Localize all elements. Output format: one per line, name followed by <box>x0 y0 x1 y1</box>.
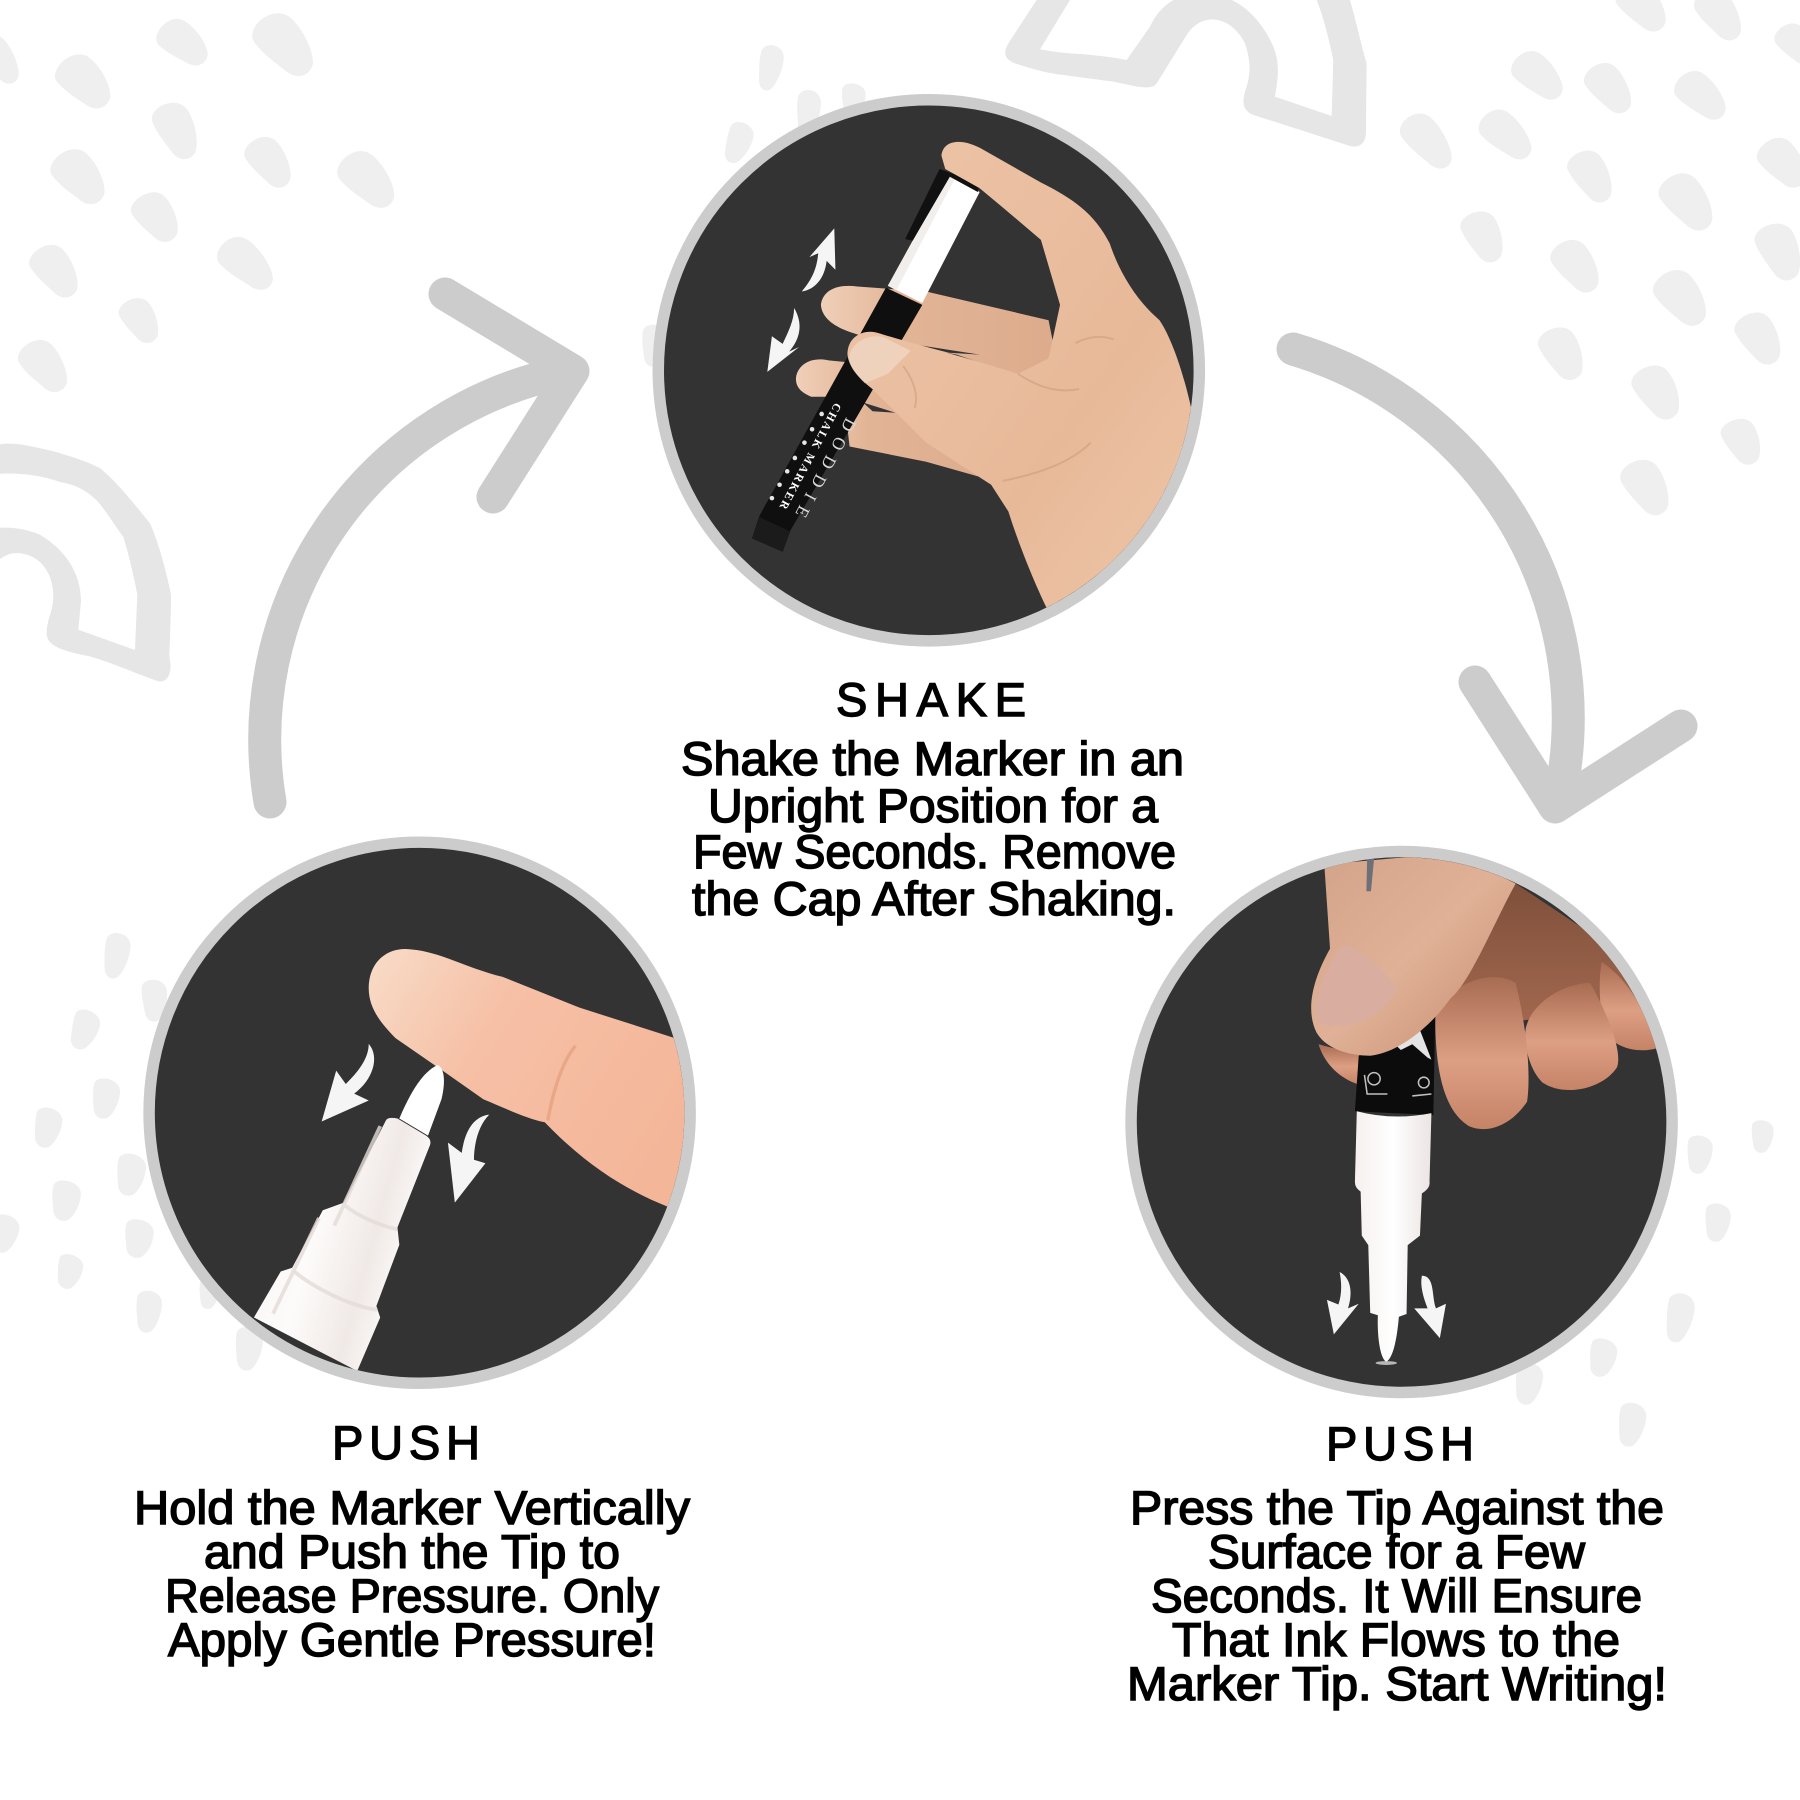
arrow: down <box>767 308 800 372</box>
body text: shake: the Cap After Shaking. <box>692 872 1176 925</box>
text block: push left <box>134 1416 691 1666</box>
body text: push right: Press the Tip Against the <box>1130 1481 1664 1534</box>
body text: push right <box>1127 1481 1667 1710</box>
thumb <box>1311 853 1516 1056</box>
arrow: up <box>802 228 835 292</box>
fingers <box>1319 962 1657 1129</box>
marker tip <box>399 1065 444 1136</box>
panel: press photo circle right <box>1131 851 1672 1392</box>
back of hand <box>1454 868 1657 1048</box>
arrow: right <box>1414 1276 1446 1338</box>
hand <box>847 142 1209 634</box>
body text: shake: Upright Position for a <box>708 779 1159 832</box>
marker: DODDIE <box>791 415 861 521</box>
finger <box>368 949 684 1206</box>
marker <box>1355 1010 1435 1115</box>
body text: shake: Shake the Marker in an <box>681 732 1184 785</box>
body text: shake: Few Seconds. Remove <box>693 825 1176 878</box>
body text: push left: Apply Gentle Pressure! <box>168 1613 656 1666</box>
arrow: push to shake <box>265 294 573 802</box>
heading: shake: SHAKE <box>836 673 1026 726</box>
body text: push left: Release Pressure. Only <box>165 1569 659 1622</box>
middle and lower fingers <box>796 286 1060 479</box>
background outline shape: top <box>1005 0 1367 146</box>
body text: push right: Seconds. It Will Ensure <box>1151 1569 1642 1622</box>
marker: CHALK MARKER <box>776 401 843 512</box>
panel: shake photo circle <box>658 100 1209 641</box>
body text: push right: Surface for a Few <box>1208 1525 1586 1578</box>
arrow: left <box>1327 1272 1359 1334</box>
panel: push photo circle left <box>149 842 709 1383</box>
background outline shape: left <box>0 444 171 681</box>
body text: push left: Hold the Marker Vertically <box>134 1481 691 1534</box>
body text: push right: Marker Tip. Start Writing! <box>1127 1657 1667 1710</box>
body text: shake <box>681 732 1184 925</box>
text block: shake <box>681 673 1184 925</box>
marker <box>752 169 980 552</box>
body text: push right: That Ink Flows to the <box>1172 1613 1620 1666</box>
heading: push right: PUSH <box>1326 1417 1474 1470</box>
arrow: left <box>322 1044 374 1122</box>
arrow: right <box>448 1115 489 1203</box>
arrow: shake to press <box>1293 349 1681 807</box>
text block: push right <box>1127 1417 1667 1710</box>
body text: push left: and Push the Tip to <box>204 1525 620 1578</box>
heading: push left: PUSH <box>332 1416 480 1469</box>
body text: push left <box>134 1481 691 1666</box>
